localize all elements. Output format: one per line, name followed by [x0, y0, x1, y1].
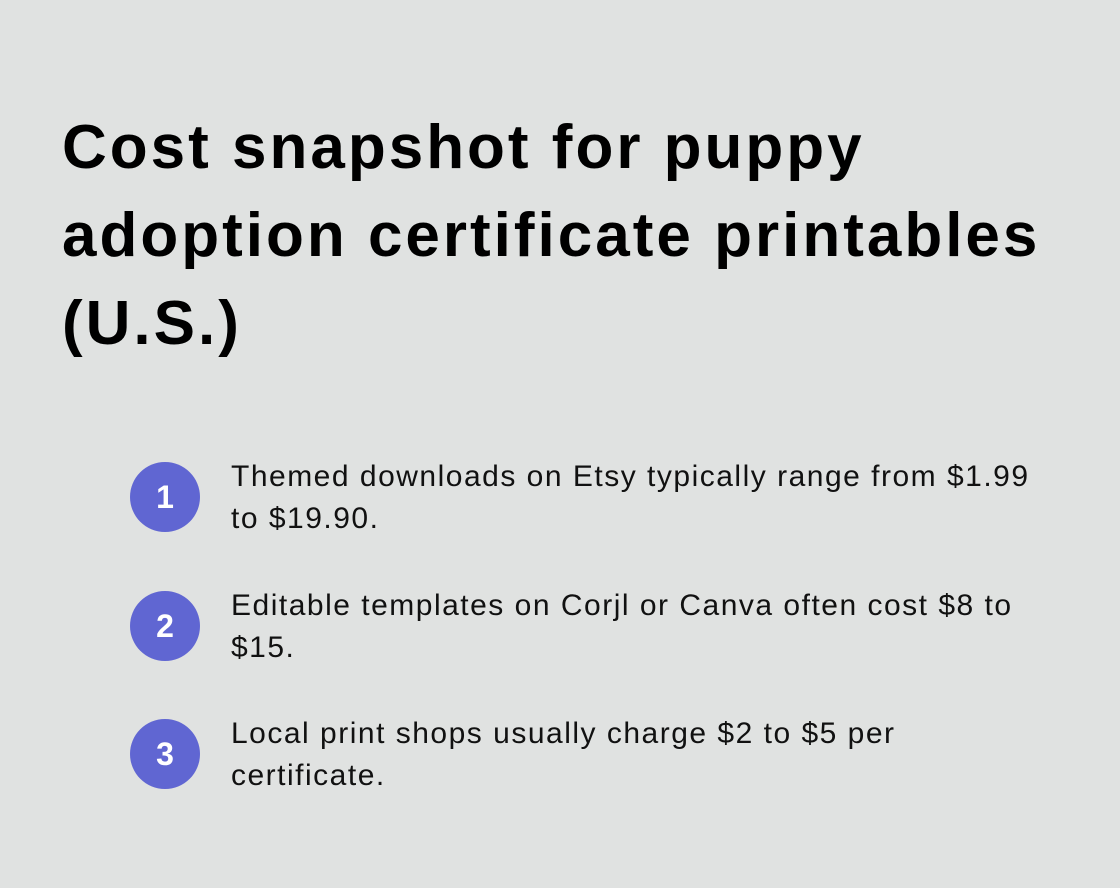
- title: [62, 113, 1040, 358]
- title: (U.S.): [62, 289, 242, 358]
- text 2: $15.: [231, 631, 295, 664]
- badge 3: [130, 719, 200, 789]
- badge 1: 1: [156, 479, 174, 515]
- text 1: Themed downloads on Etsy typically range from $1.99: [231, 460, 1030, 493]
- badge 2: [130, 591, 200, 661]
- item 1: [130, 460, 1030, 535]
- item 3: [130, 717, 896, 792]
- badge 2: 2: [156, 608, 174, 644]
- title: Cost snapshot for puppy: [62, 113, 865, 182]
- text 2: Editable templates on Corjl or Canva often cost $8 to: [231, 589, 1013, 622]
- text 3: Local print shops usually charge $2 to $5 per: [231, 717, 896, 750]
- title: adoption certificate printables: [62, 201, 1040, 270]
- text 3: certificate.: [231, 759, 386, 792]
- text 3: [231, 717, 896, 792]
- text 1: to $19.90.: [231, 502, 379, 535]
- badge 3: 3: [156, 736, 174, 772]
- text 2: [231, 589, 1013, 664]
- badge 1: [130, 462, 200, 532]
- item 2: [130, 589, 1013, 664]
- text 1: [231, 460, 1030, 535]
